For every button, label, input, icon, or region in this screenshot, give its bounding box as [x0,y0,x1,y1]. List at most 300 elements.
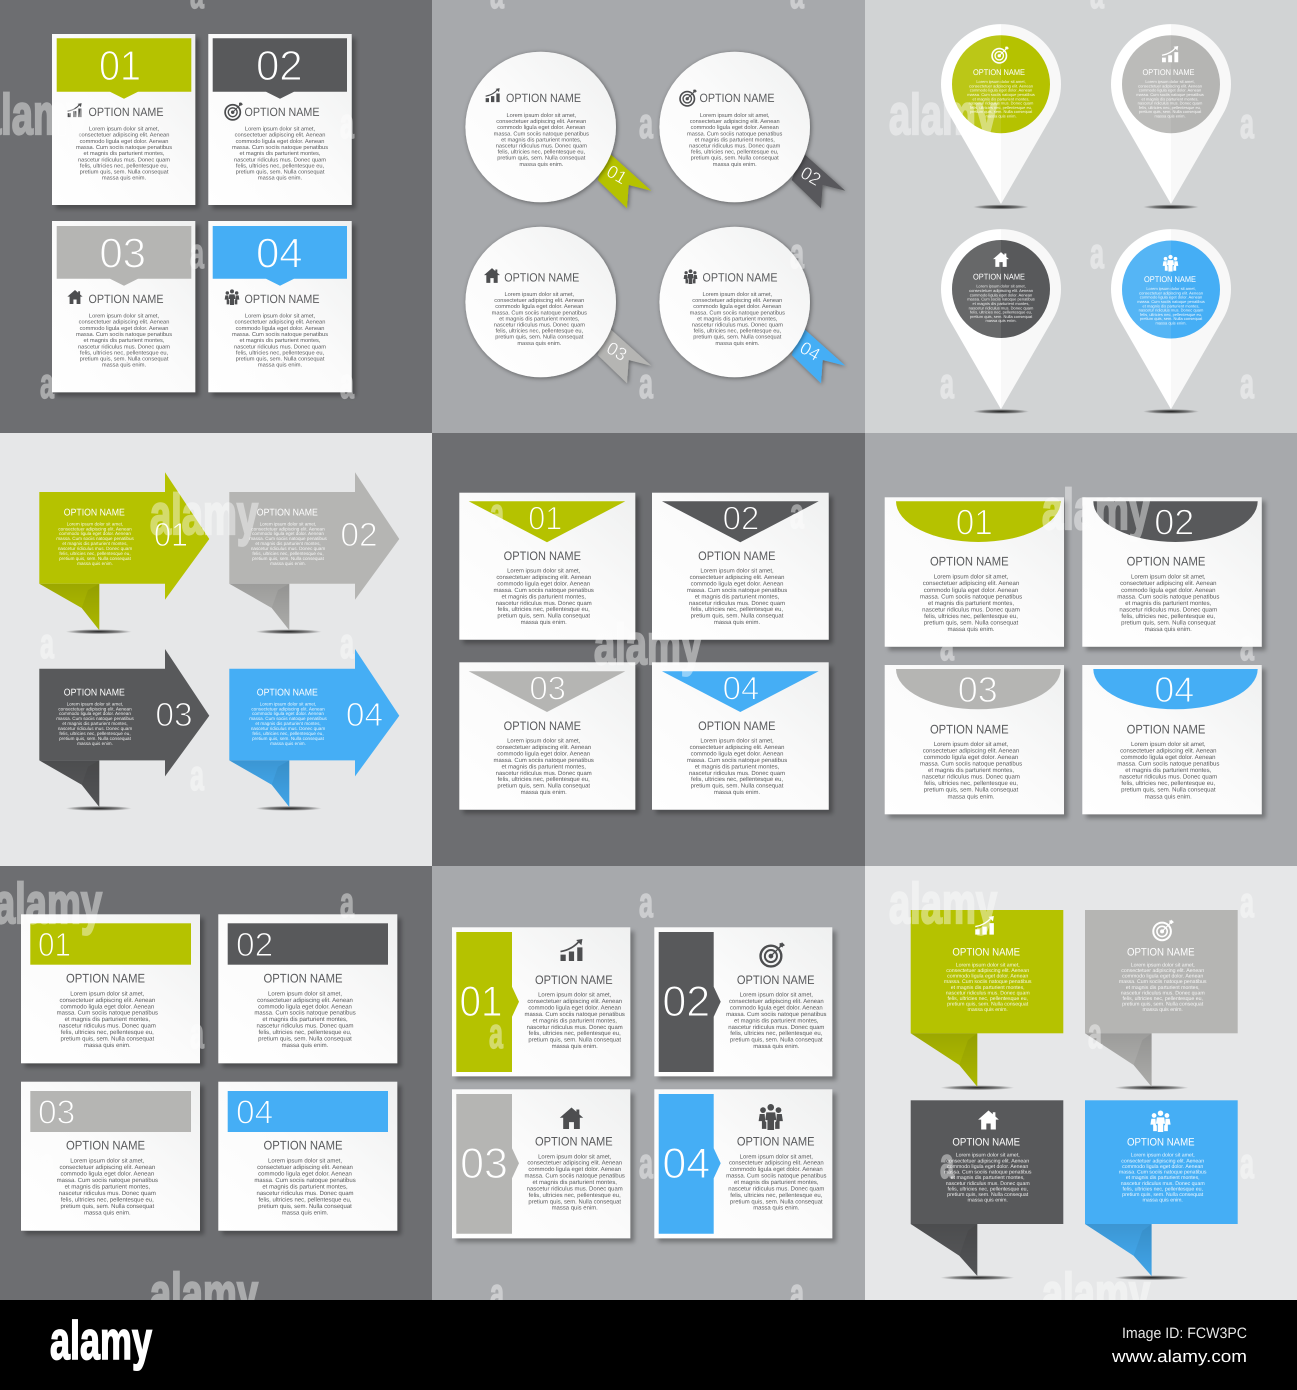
pin green [941,24,1061,209]
card 02: commodo ligula eget dolor. Aenean [236,138,324,145]
card 04: OPTION NAME [698,719,775,733]
circle 01: massa. Cum sociis natoque penatibus [494,130,589,137]
watermarks: a [190,230,205,278]
card 04: et magnis dis parturient montes, [240,337,321,344]
block 04: consectetuer adipiscing elit. Aenean [1121,1158,1204,1164]
card 03: massa quis enim. [521,789,567,796]
card 03: consectetuer adipiscing elit. Aenean [527,1160,622,1167]
arrow 01: commodo ligula eget dolor. Aenean [59,531,131,536]
card 01: OPTION NAME [88,105,164,119]
footer logo: alamy [50,1311,152,1371]
circle 01: nascetur ridiculus mus. Donec quam [496,143,587,150]
block 01: et magnis dis parturient montes, [951,985,1025,991]
card 04: pretium quis, sem. Nulla consequat [236,356,325,363]
circle 01: massa quis enim. [519,161,564,168]
circle 02: commodo ligula eget dolor. Aenean [691,124,779,131]
arrow 04: felis, ultricies nec, pellentesque eu, [252,731,324,736]
watermarks: a [490,1270,505,1318]
pin grey: massa quis enim. [1154,114,1186,119]
circle 03: Lorem ipsum dolor sit amet, [505,291,575,298]
card 02: massa quis enim. [282,1042,329,1049]
card 02: 02 [723,500,759,537]
card 04: pretium quis, sem. Nulla consequat [730,1198,823,1205]
card 03: felis, ultricies nec, pellentesque eu, [529,1192,621,1199]
card 04 [208,221,352,392]
arrow 03: OPTION NAME [64,687,125,698]
card 04: nascetur ridiculus mus. Donec quam [234,343,326,350]
pin blue: nascetur ridiculus mus. Donec quam [1139,308,1204,313]
pin blue: et magnis dis parturient montes, [1143,303,1199,308]
block 02: felis, ultricies nec, pellentesque eu, [1122,996,1203,1002]
circle 04: massa. Cum sociis natoque penatibus [690,309,785,316]
panel: circles with ribbons [465,52,845,383]
card 04 [652,662,829,810]
block 04 [1085,1100,1238,1280]
card 01: 01 [99,42,141,89]
pin grey: OPTION NAME [1142,67,1195,77]
card 01: OPTION NAME [504,549,581,563]
image id: Image ID: FCW3PC [1122,1325,1247,1342]
card 02: OPTION NAME [737,973,815,987]
card 04: et magnis dis parturient montes, [1125,767,1212,774]
card 01: massa quis enim. [84,1042,131,1049]
arrow 03: Lorem ipsum dolor sit amet, [67,701,123,706]
card 01: commodo ligula eget dolor. Aenean [924,587,1018,594]
circle 04: Lorem ipsum dolor sit amet, [703,291,773,298]
pin grey: felis, ultricies nec, pellentesque eu, [1139,105,1201,110]
pin green: felis, ultricies nec, pellentesque eu, [970,105,1032,110]
card 03: nascetur ridiculus mus. Donec quam [59,1190,156,1197]
watermarks: a [40,360,55,408]
circle 01: pretium quis, sem. Nulla consequat [497,155,586,162]
card 03: commodo ligula eget dolor. Aenean [80,325,168,332]
card 04: OPTION NAME [1127,722,1205,736]
block 02: consectetuer adipiscing elit. Aenean [1121,968,1204,974]
block 02: commodo ligula eget dolor. Aenean [1122,974,1203,980]
panel: map pins [941,24,1231,414]
card 02: nascetur ridiculus mus. Donec quam [256,1023,354,1030]
watermarks: a [340,360,355,408]
card 02: felis, ultricies nec, pellentesque eu, [236,162,325,169]
card 01: felis, ultricies nec, pellentesque eu, [80,162,169,169]
block 04: nascetur ridiculus mus. Donec quam [1121,1181,1205,1187]
circle 02: consectetuer adipiscing elit. Aenean [690,118,780,125]
card 04: nascetur ridiculus mus. Donec quam [689,770,785,777]
card 03: et magnis dis parturient montes, [65,1184,150,1191]
block 03: commodo ligula eget dolor. Aenean [947,1164,1028,1170]
card 03: commodo ligula eget dolor. Aenean [528,1166,621,1173]
card 03: nascetur ridiculus mus. Donec quam [922,774,1020,781]
card 01 [52,34,195,205]
card 01: Lorem ipsum dolor sit amet, [70,990,145,997]
card 03: massa quis enim. [552,1205,598,1212]
block 02 [1085,910,1238,1090]
arrow 04: massa. Cum sociis natoque penatibus [249,716,328,721]
watermarks: a [1090,230,1105,278]
watermarks: a [40,1140,55,1188]
circle 01: commodo ligula eget dolor. Aenean [497,124,585,131]
circle 04: 04 [796,337,824,365]
card 03: felis, ultricies nec, pellentesque eu, [924,780,1018,787]
card 04: OPTION NAME [264,1139,342,1153]
arrow 01: massa quis enim. [77,561,113,566]
watermarks: a [639,1140,654,1188]
block 01: Lorem ipsum dolor sit amet, [956,962,1020,968]
card 03: OPTION NAME [504,719,581,733]
card 01: consectetuer adipiscing elit. Aenean [59,997,155,1004]
card 02: massa. Cum sociis natoque penatibus [1117,593,1219,600]
arrow 02: massa quis enim. [270,561,306,566]
pin dark: commodo ligula eget dolor. Aenean [970,292,1032,297]
watermarks: a [190,1010,205,1058]
card 03: felis, ultricies nec, pellentesque eu, [61,1197,154,1204]
card 02: consectetuer adipiscing elit. Aenean [690,574,784,581]
pin dark: et magnis dis parturient montes, [973,301,1029,306]
block 01: pretium quis, sem. Nulla consequat [947,1002,1029,1008]
card 01: massa quis enim. [521,619,567,626]
block 04: felis, ultricies nec, pellentesque eu, [1122,1186,1203,1192]
card 04: 04 [236,1094,273,1131]
card 04: massa. Cum sociis natoque penatibus [687,757,787,764]
arrow 03: felis, ultricies nec, pellentesque eu, [59,731,131,736]
card 02: felis, ultricies nec, pellentesque eu, [730,1030,823,1037]
block 03: nascetur ridiculus mus. Donec quam [946,1181,1030,1187]
pin green: massa. Cum sociis natoque penatibus [967,92,1035,97]
card 04: consectetuer adipiscing elit. Aenean [257,1164,353,1171]
circle 03: felis, ultricies nec, pellentesque eu, [496,328,583,335]
card 04 [654,1089,832,1238]
card 02: nascetur ridiculus mus. Donec quam [1119,606,1217,613]
card 02: massa quis enim. [714,619,760,626]
panel: notched header cards [52,34,352,392]
arrow 04 [229,649,399,811]
card 01: felis, ultricies nec, pellentesque eu, [529,1030,621,1037]
card 01: massa. Cum sociis natoque penatibus [494,587,594,594]
card 03: commodo ligula eget dolor. Aenean [924,754,1018,761]
block 04: OPTION NAME [1127,1137,1195,1149]
circle 02 [659,52,845,208]
circle 04: consectetuer adipiscing elit. Aenean [692,297,782,304]
pin dark: nascetur ridiculus mus. Donec quam [969,305,1034,310]
card 01: 01 [956,502,993,543]
card 01: et magnis dis parturient montes, [65,1016,150,1023]
card 04: Lorem ipsum dolor sit amet, [740,1153,813,1160]
card 04: pretium quis, sem. Nulla consequat [1121,787,1216,794]
card 04: consectetuer adipiscing elit. Aenean [235,319,325,326]
card 02: massa quis enim. [258,175,303,182]
circle 01: et magnis dis parturient montes, [501,136,582,143]
card 02 [218,914,397,1063]
card 04: massa. Cum sociis natoque penatibus [232,331,328,338]
card 03: pretium quis, sem. Nulla consequat [497,783,590,790]
card 01: felis, ultricies nec, pellentesque eu, [61,1029,154,1036]
card 03: massa quis enim. [947,793,995,800]
card 01: massa. Cum sociis natoque penatibus [920,593,1022,600]
card 04: 04 [1154,669,1194,710]
card 01: Lorem ipsum dolor sit amet, [507,568,581,575]
pin grey: commodo ligula eget dolor. Aenean [1139,88,1201,93]
card 02: consectetuer adipiscing elit. Aenean [729,998,824,1005]
watermarks: alamy [889,83,997,147]
circle 04: felis, ultricies nec, pellentesque eu, [694,328,781,335]
card 01: consectetuer adipiscing elit. Aenean [527,998,622,1005]
pin green: commodo ligula eget dolor. Aenean [970,88,1032,93]
card 02 [652,493,829,640]
card 04: 04 [256,229,303,276]
watermarks: a [1240,100,1255,148]
card 02: nascetur ridiculus mus. Donec quam [728,1024,824,1031]
block 04: massa. Cum sociis natoque penatibus [1119,1170,1207,1176]
card 02: consectetuer adipiscing elit. Aenean [235,132,325,139]
block 04: commodo ligula eget dolor. Aenean [1122,1164,1203,1170]
card 02: pretium quis, sem. Nulla consequat [1121,619,1216,626]
card 01: pretium quis, sem. Nulla consequat [80,169,169,176]
card 03: massa. Cum sociis natoque penatibus [57,1177,158,1184]
circle 03: 03 [603,338,630,365]
block 03: pretium quis, sem. Nulla consequat [947,1192,1029,1198]
card 03: massa. Cum sociis natoque penatibus [525,1173,625,1180]
watermarks: a [190,752,205,800]
block 02: pretium quis, sem. Nulla consequat [1122,1002,1204,1008]
card 03: et magnis dis parturient montes, [928,767,1014,774]
card 01: massa quis enim. [102,175,147,182]
circle 02: massa quis enim. [713,161,757,168]
card 01: OPTION NAME [66,971,145,985]
arrow 03: et magnis dis parturient montes, [62,721,128,726]
card 03: nascetur ridiculus mus. Donec quam [496,770,592,777]
card 01: felis, ultricies nec, pellentesque eu, [498,606,590,613]
card 04: 04 [662,1140,710,1188]
card 03: Lorem ipsum dolor sit amet, [934,741,1009,748]
card 04: et magnis dis parturient montes, [695,763,780,770]
card 02: pretium quis, sem. Nulla consequat [258,1036,352,1043]
watermarks: a [940,1140,955,1188]
circle 01: 01 [603,161,630,188]
arrow 04: pretium quis, sem. Nulla consequat [252,736,325,741]
circle 02: massa. Cum sociis natoque penatibus [687,130,783,137]
card 04: massa quis enim. [714,789,760,796]
block 03: felis, ultricies nec, pellentesque eu, [947,1186,1028,1192]
block 03: et magnis dis parturient montes, [951,1175,1025,1181]
card 01: commodo ligula eget dolor. Aenean [497,581,590,588]
circle 01 [465,52,651,208]
card 04: consectetuer adipiscing elit. Aenean [729,1160,824,1167]
arrow 01: Lorem ipsum dolor sit amet, [67,521,123,526]
card 04 [218,1082,397,1231]
pin green: et magnis dis parturient montes, [973,96,1029,101]
circle 04: et magnis dis parturient montes, [697,315,778,322]
arrow 04: commodo ligula eget dolor. Aenean [252,711,324,716]
card 02 [654,927,832,1076]
card 01: nascetur ridiculus mus. Donec quam [922,606,1020,613]
pin grey: nascetur ridiculus mus. Donec quam [1138,101,1203,106]
card 02: massa. Cum sociis natoque penatibus [726,1011,826,1018]
pin blue: felis, ultricies nec, pellentesque eu, [1140,312,1202,317]
arrow 03: nascetur ridiculus mus. Donec quam [58,726,132,731]
card 02: consectetuer adipiscing elit. Aenean [1120,580,1217,587]
card 01: OPTION NAME [535,973,613,987]
card 04: OPTION NAME [244,292,320,306]
circle 02: felis, ultricies nec, pellentesque eu, [691,149,779,156]
pin dark: massa quis enim. [985,318,1017,323]
card 01: et magnis dis parturient montes, [501,593,586,600]
arrow 02: massa. Cum sociis natoque penatibus [249,536,328,541]
watermarks: a [1240,1140,1255,1188]
card 02: 02 [662,978,710,1026]
pin green: massa quis enim. [985,114,1017,119]
card 02: massa. Cum sociis natoque penatibus [232,144,328,151]
block 01: consectetuer adipiscing elit. Aenean [946,968,1029,974]
arrow 01: massa. Cum sociis natoque penatibus [56,536,135,541]
circle 04: pretium quis, sem. Nulla consequat [693,334,782,341]
pin dark: massa. Cum sociis natoque penatibus [967,297,1035,302]
arrow 01: OPTION NAME [64,508,125,519]
circle 03: commodo ligula eget dolor. Aenean [495,303,583,310]
circle 01: OPTION NAME [506,91,581,105]
watermarks: a [40,620,55,668]
card 03: et magnis dis parturient montes, [84,337,165,344]
card 03: nascetur ridiculus mus. Donec quam [78,343,170,350]
pin blue: OPTION NAME [1144,274,1196,284]
card 01: pretium quis, sem. Nulla consequat [528,1037,621,1044]
card 01 [885,497,1064,647]
card 04: Lorem ipsum dolor sit amet, [700,738,774,745]
card 03: consectetuer adipiscing elit. Aenean [79,319,169,326]
watermarks: a [1240,360,1255,408]
block 01: OPTION NAME [952,946,1020,958]
card 01: et magnis dis parturient montes, [928,600,1014,607]
watermarks: a [1090,752,1105,800]
watermarks: a [489,1010,504,1058]
card 04: 04 [723,670,759,707]
footer strip [0,1300,1297,1390]
card 02: pretium quis, sem. Nulla consequat [691,613,784,620]
pin dark [941,229,1061,414]
circle 03 [465,227,651,383]
card 03: Lorem ipsum dolor sit amet, [89,312,160,320]
card 04: Lorem ipsum dolor sit amet, [245,312,316,320]
arrow 02: OPTION NAME [257,508,318,519]
arrow 01: et magnis dis parturient montes, [62,541,128,546]
watermarks: alamy [594,613,702,677]
card 04: pretium quis, sem. Nulla consequat [691,783,784,790]
arrow 04: nascetur ridiculus mus. Donec quam [251,726,325,731]
card 01: nascetur ridiculus mus. Donec quam [78,156,170,163]
card 04: felis, ultricies nec, pellentesque eu, [730,1192,823,1199]
card 01: massa quis enim. [552,1043,598,1050]
card 01 [459,493,635,640]
circle 04: nascetur ridiculus mus. Donec quam [692,322,783,329]
card 03: Lorem ipsum dolor sit amet, [507,738,581,745]
card 01 [452,927,630,1076]
card 04: massa. Cum sociis natoque penatibus [1117,761,1219,768]
card 01: Lorem ipsum dolor sit amet, [934,574,1009,581]
card 03: et magnis dis parturient montes, [501,763,586,770]
card 01: consectetuer adipiscing elit. Aenean [923,580,1019,587]
card 02: commodo ligula eget dolor. Aenean [730,1005,823,1012]
block 01: commodo ligula eget dolor. Aenean [947,974,1028,980]
block 04: Lorem ipsum dolor sit amet, [1131,1153,1195,1159]
card 02: 02 [1154,502,1194,543]
card 03 [459,662,635,810]
card 03: massa. Cum sociis natoque penatibus [76,331,172,338]
card 04: commodo ligula eget dolor. Aenean [258,1171,352,1178]
arrow 03: massa quis enim. [77,741,113,746]
card 03: consectetuer adipiscing elit. Aenean [923,748,1019,755]
pin grey: Lorem ipsum dolor sit amet, [1145,79,1195,84]
card 02: felis, ultricies nec, pellentesque eu, [1121,613,1216,620]
block 01: nascetur ridiculus mus. Donec quam [946,990,1030,996]
card 03: pretium quis, sem. Nulla consequat [80,356,169,363]
card 02: felis, ultricies nec, pellentesque eu, [691,606,783,613]
card 04: OPTION NAME [737,1135,815,1149]
card 02: Lorem ipsum dolor sit amet, [700,568,774,575]
pin grey: et magnis dis parturient montes, [1142,96,1198,101]
card 04: pretium quis, sem. Nulla consequat [258,1203,352,1210]
watermarks: a [940,622,955,670]
card 03: OPTION NAME [66,1139,145,1153]
card 02: et magnis dis parturient montes, [240,150,321,157]
watermarks: a [340,620,355,668]
watermarks: a [639,100,654,148]
card 03: 03 [529,670,566,707]
pin blue [1111,229,1231,414]
card 01: OPTION NAME [930,555,1009,569]
panel: half-ellipse header cards [885,497,1262,814]
card 01: consectetuer adipiscing elit. Aenean [79,132,169,139]
card 03 [452,1089,630,1238]
card 04: massa. Cum sociis natoque penatibus [726,1173,826,1180]
card 03: 03 [460,1140,508,1188]
arrow 02: et magnis dis parturient montes, [255,541,321,546]
circle 01: felis, ultricies nec, pellentesque eu, [498,149,585,156]
block 01 [911,910,1063,1090]
card 03: felis, ultricies nec, pellentesque eu, [80,349,169,356]
card 01: et magnis dis parturient montes, [532,1017,617,1024]
card 04: consectetuer adipiscing elit. Aenean [690,744,784,751]
block 03: consectetuer adipiscing elit. Aenean [946,1158,1029,1164]
card 02: OPTION NAME [244,105,320,119]
card 04: felis, ultricies nec, pellentesque eu, [1121,780,1216,787]
pin blue: massa. Cum sociis natoque penatibus [1137,299,1205,304]
watermarks: alamy [1042,478,1150,542]
card 02: Lorem ipsum dolor sit amet, [1131,574,1206,581]
card 03: et magnis dis parturient montes, [532,1179,617,1186]
card 02: 02 [236,927,273,964]
panel: rectangular header cards [21,914,397,1231]
card 02: OPTION NAME [264,971,342,985]
arrow 02: consectetuer adipiscing elit. Aenean [251,526,325,531]
block 02: et magnis dis parturient montes, [1126,985,1200,991]
card 03: pretium quis, sem. Nulla consequat [924,787,1019,794]
panel: side bar cards [452,927,832,1238]
block 02: Lorem ipsum dolor sit amet, [1131,962,1195,968]
arrow 04: OPTION NAME [257,687,318,698]
card 01: pretium quis, sem. Nulla consequat [924,619,1019,626]
circle 02: et magnis dis parturient montes, [695,136,775,143]
card 01: nascetur ridiculus mus. Donec quam [527,1024,623,1031]
card 02 [1082,497,1262,647]
arrow 02: commodo ligula eget dolor. Aenean [252,531,324,536]
arrow 02: pretium quis, sem. Nulla consequat [252,556,325,561]
card 03: massa. Cum sociis natoque penatibus [494,757,594,764]
block 04: massa quis enim. [1143,1198,1183,1204]
circle 02: 02 [797,162,824,190]
card 01: Lorem ipsum dolor sit amet, [89,126,160,132]
watermarks: a [790,490,805,538]
circle 03: consectetuer adipiscing elit. Aenean [494,297,584,304]
watermarks: a [490,490,505,538]
